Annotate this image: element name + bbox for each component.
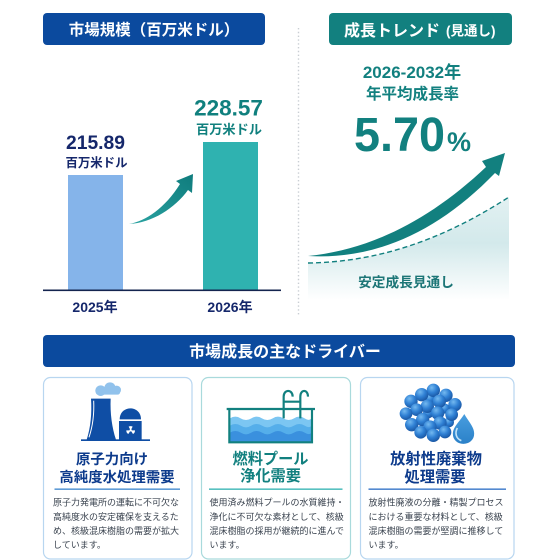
body text: 使用済み燃料プールの水質維持・ xyxy=(210,496,345,508)
body text: 高純度水の安定確保を支えるた xyxy=(53,511,179,522)
dotted divider xyxy=(298,28,300,316)
banner: growth drivers: 市場成長の主なドライバー xyxy=(189,342,381,361)
body text: しています。 xyxy=(53,540,106,550)
dashed line xyxy=(308,197,509,263)
chart: growth trend xyxy=(308,153,509,300)
banner: growth drivers xyxy=(43,335,515,367)
body text: 混床樹脂の採用が継続的に進んで xyxy=(210,525,344,536)
text: CAGR label: 年平均成長率 xyxy=(366,84,459,103)
title xyxy=(390,450,482,486)
title xyxy=(233,450,308,485)
bar: 2026 xyxy=(203,142,258,290)
label: stable outlook: 安定成長見通し xyxy=(358,274,454,290)
panel: radioactive waste xyxy=(360,378,514,559)
title: 浄化需要 xyxy=(240,468,301,485)
body text: め、核級混床樹脂の需要が拡大 xyxy=(53,525,179,536)
icon: nuclear plant xyxy=(81,382,150,441)
bar chart: market size xyxy=(43,96,281,315)
unit: 2026: 百万米ドル xyxy=(196,121,262,137)
panel: nuclear high purity water xyxy=(44,378,192,559)
heading: growth trend xyxy=(329,13,512,45)
text: period: 2026-2032年 xyxy=(363,62,461,82)
heading: market size: 市場規模（百万米ドル） xyxy=(69,20,239,39)
label: 2026: 2026年 xyxy=(207,299,253,315)
value: 2026: 228.57 xyxy=(194,96,263,120)
title: 高純度水処理需要 xyxy=(59,468,175,486)
title: 放射性廃棄物 xyxy=(390,450,482,468)
body text: 混床樹脂の需要が堅調に推移して xyxy=(368,525,503,536)
value: CAGR: % xyxy=(447,127,471,157)
body text: 放射性廃液の分離・精製プロセス xyxy=(368,496,504,508)
heading: market size xyxy=(43,13,265,45)
axis xyxy=(43,290,281,291)
title: 原子力向け xyxy=(76,451,148,468)
value: CAGR: 5.70 xyxy=(354,109,445,162)
title: 燃料プール xyxy=(233,450,308,468)
bar: 2025 xyxy=(68,175,123,290)
arrow: growth trend xyxy=(308,153,505,256)
body text xyxy=(210,496,345,550)
value: 2025: 215.89 xyxy=(66,133,125,154)
title: 処理需要 xyxy=(404,469,466,486)
icon: pool xyxy=(227,391,315,442)
icon: resin beads and drop xyxy=(400,384,475,444)
arrow: growth xyxy=(129,174,193,224)
body text: における重要な材料として、核級 xyxy=(368,511,503,522)
body text: います。 xyxy=(368,540,404,550)
heading: growth trend: (見通し) xyxy=(446,24,496,38)
body text: います。 xyxy=(210,540,245,550)
panel: spent fuel pool xyxy=(202,378,350,559)
body text xyxy=(53,496,179,550)
heading: growth trend: 成長トレンド xyxy=(344,21,440,40)
title xyxy=(59,451,175,486)
body text: 原子力発電所の運転に不可欠な xyxy=(53,496,179,508)
area: stable outlook xyxy=(308,197,509,300)
body text xyxy=(368,496,504,550)
body text: 浄化に不可欠な素材として、核級 xyxy=(210,511,344,522)
unit: 2025: 百万米ドル xyxy=(66,155,127,170)
label: 2025: 2025年 xyxy=(72,299,118,315)
